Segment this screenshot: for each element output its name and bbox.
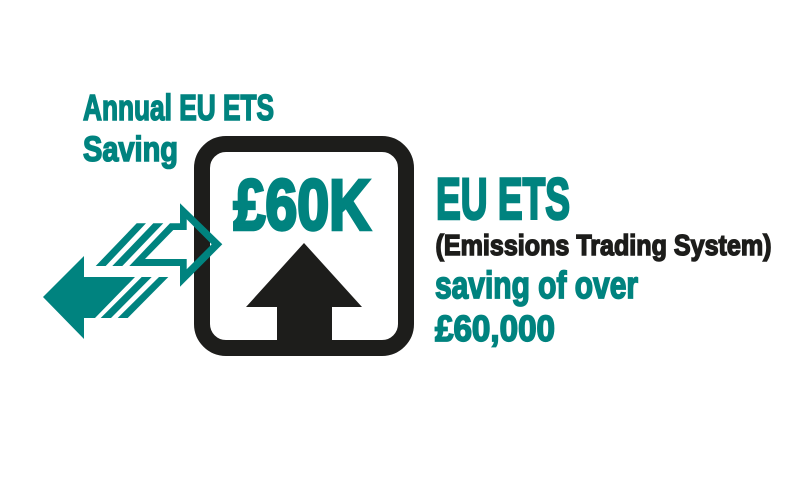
heading: EU ETS: EU ETS — [436, 167, 570, 232]
icon: rounded square frame — [202, 144, 406, 348]
text: saving of over: saving of over — [435, 265, 638, 307]
heading: annual saving: Saving — [83, 130, 178, 169]
arrow: lower stripes — [101, 277, 168, 318]
heading: annual saving: Annual EU ETS — [83, 87, 274, 128]
arrow: upper stripes — [96, 223, 163, 266]
value: 60K: £60K — [234, 166, 370, 246]
icon: exchange arrows — [43, 203, 222, 339]
arrow: filled left — [43, 256, 135, 339]
heading: annual saving — [83, 87, 274, 169]
arrow: outlined right — [129, 203, 222, 287]
text: amount: £60,000 — [435, 308, 555, 349]
text block: EU ETS description — [435, 167, 772, 349]
icon: up arrow — [246, 243, 362, 342]
